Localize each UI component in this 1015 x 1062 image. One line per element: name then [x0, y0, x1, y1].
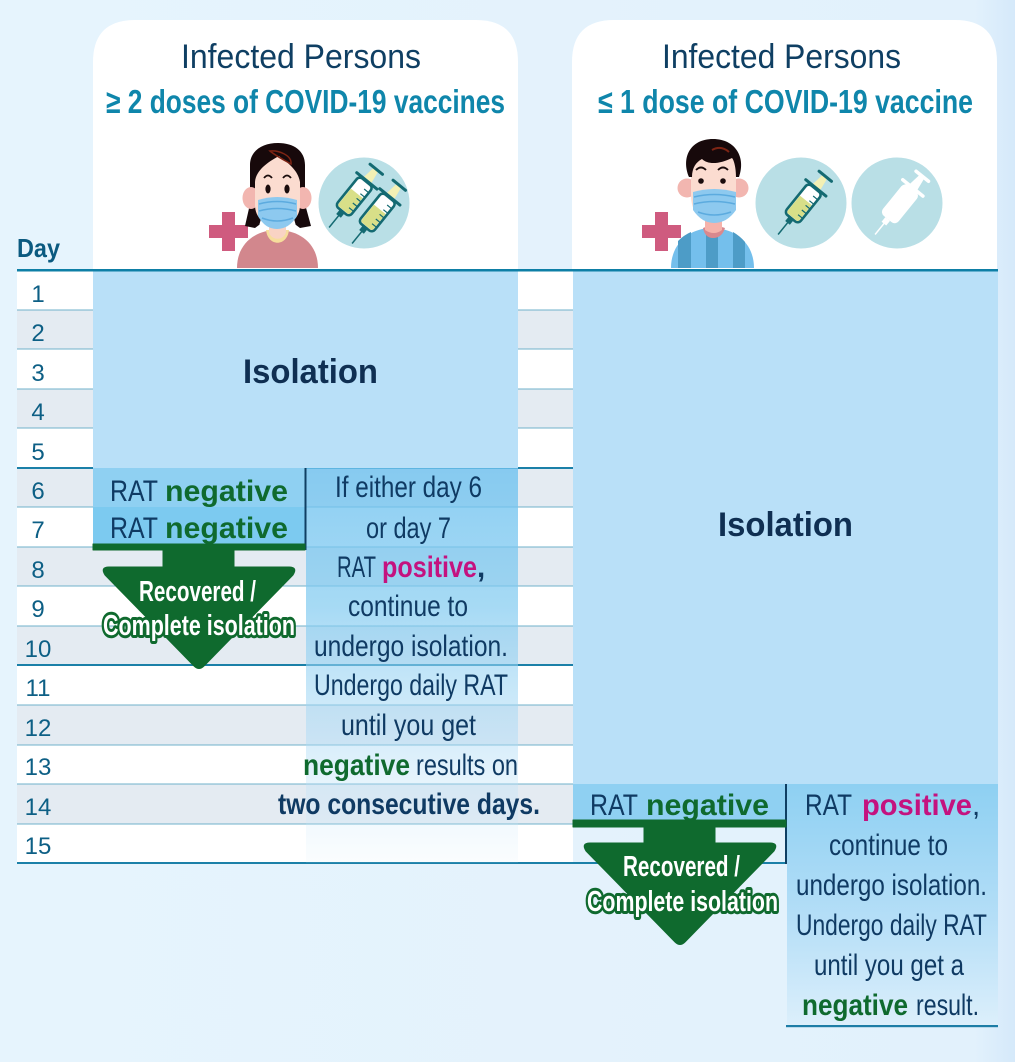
icon: missing vaccine dose	[852, 158, 942, 248]
panel: left RAT positive instructions: RAT	[337, 551, 376, 584]
day numbers: 10	[25, 636, 51, 663]
panel: right RAT positive instructions: RAT	[805, 789, 852, 822]
panel: left RAT positive instructions: undergo isolation.	[314, 630, 508, 663]
panel: right RAT negative cell	[573, 784, 787, 864]
panel: right RAT positive instructions: continue to	[829, 829, 948, 862]
panel: left RAT negative cells	[93, 468, 306, 550]
heading: right column: Infected Persons	[662, 38, 901, 76]
day numbers: 14	[25, 794, 51, 821]
panel: left isolation block: Isolation	[243, 353, 378, 391]
day column heading: Day	[17, 233, 60, 263]
panel: left RAT positive instructions: negative	[303, 749, 410, 782]
panel: left RAT negative cells: negative	[165, 512, 288, 545]
day numbers	[25, 281, 51, 860]
panel: left RAT positive instructions: positive	[382, 551, 477, 584]
panel: right column header card	[572, 20, 997, 270]
arrow: right recovered: Recovered /	[623, 851, 740, 883]
panel: left RAT positive instructions: or day 7	[366, 512, 451, 545]
day numbers: 15	[25, 833, 51, 860]
day numbers: 2	[31, 320, 45, 347]
panel: right RAT positive instructions: ,	[972, 789, 980, 822]
panel: right RAT positive instructions: positive	[862, 789, 972, 822]
icon: woman with mask	[209, 143, 318, 268]
day numbers: 12	[25, 715, 51, 742]
panel: left RAT positive instructions: until you get	[341, 709, 476, 742]
day numbers: 9	[31, 596, 45, 623]
panel: left RAT positive instructions: Undergo daily RAT	[314, 669, 508, 702]
arrow: left recovered	[93, 544, 305, 668]
day numbers: 3	[31, 360, 45, 387]
panel: left RAT positive instructions: ,	[477, 551, 485, 584]
day numbers: 11	[26, 675, 50, 702]
panel: left column header card	[93, 20, 518, 270]
day numbers: 4	[31, 399, 45, 426]
panel: left isolation block	[93, 271, 518, 468]
panel: right RAT positive instructions: until you get a	[814, 949, 964, 982]
panel: right RAT positive instructions: result.	[916, 989, 979, 1022]
icon: two vaccine doses	[318, 158, 410, 252]
arrow: right recovered: Complete isolation	[587, 886, 778, 918]
panel: right RAT positive instructions: negative	[802, 989, 908, 1022]
panel: left RAT negative cells: negative	[165, 475, 288, 508]
panel: right isolation block	[573, 271, 998, 784]
table rows	[17, 271, 786, 863]
day numbers: 7	[31, 517, 45, 544]
panel: left RAT positive instructions: continue to	[348, 590, 468, 623]
icon: man with mask	[642, 139, 754, 268]
panel: left RAT negative cells: RAT	[110, 512, 158, 545]
day numbers: 6	[31, 478, 45, 505]
heading: right column	[598, 38, 973, 120]
panel: left RAT positive instructions	[278, 468, 540, 863]
panel: right RAT positive instructions	[786, 784, 998, 1027]
panel: left RAT negative cells: RAT	[110, 475, 158, 508]
heading: left column: ≥ 2 doses of COVID-19 vaccines	[106, 83, 505, 120]
day numbers: 1	[31, 281, 45, 308]
day numbers: 8	[31, 557, 45, 584]
arrow: left recovered: Recovered /	[139, 576, 256, 608]
panel: right RAT negative cell: RAT	[590, 789, 638, 822]
panel: left RAT positive instructions: two consecutive days.	[278, 788, 540, 821]
panel: right RAT negative cell: negative	[646, 789, 769, 822]
panel: right isolation block: Isolation	[718, 506, 853, 544]
heading: left column: Infected Persons	[181, 38, 421, 76]
day numbers: 13	[25, 754, 51, 781]
panel: left RAT positive instructions: If either day 6	[335, 471, 482, 504]
day numbers: 5	[31, 439, 45, 466]
heading: left column	[106, 38, 505, 120]
panel: left RAT positive instructions: results on	[416, 749, 518, 782]
header rule	[17, 269, 998, 272]
arrow: left recovered: Complete isolation	[103, 610, 295, 642]
icon: one vaccine dose	[756, 158, 846, 248]
arrow: right recovered	[573, 820, 786, 944]
